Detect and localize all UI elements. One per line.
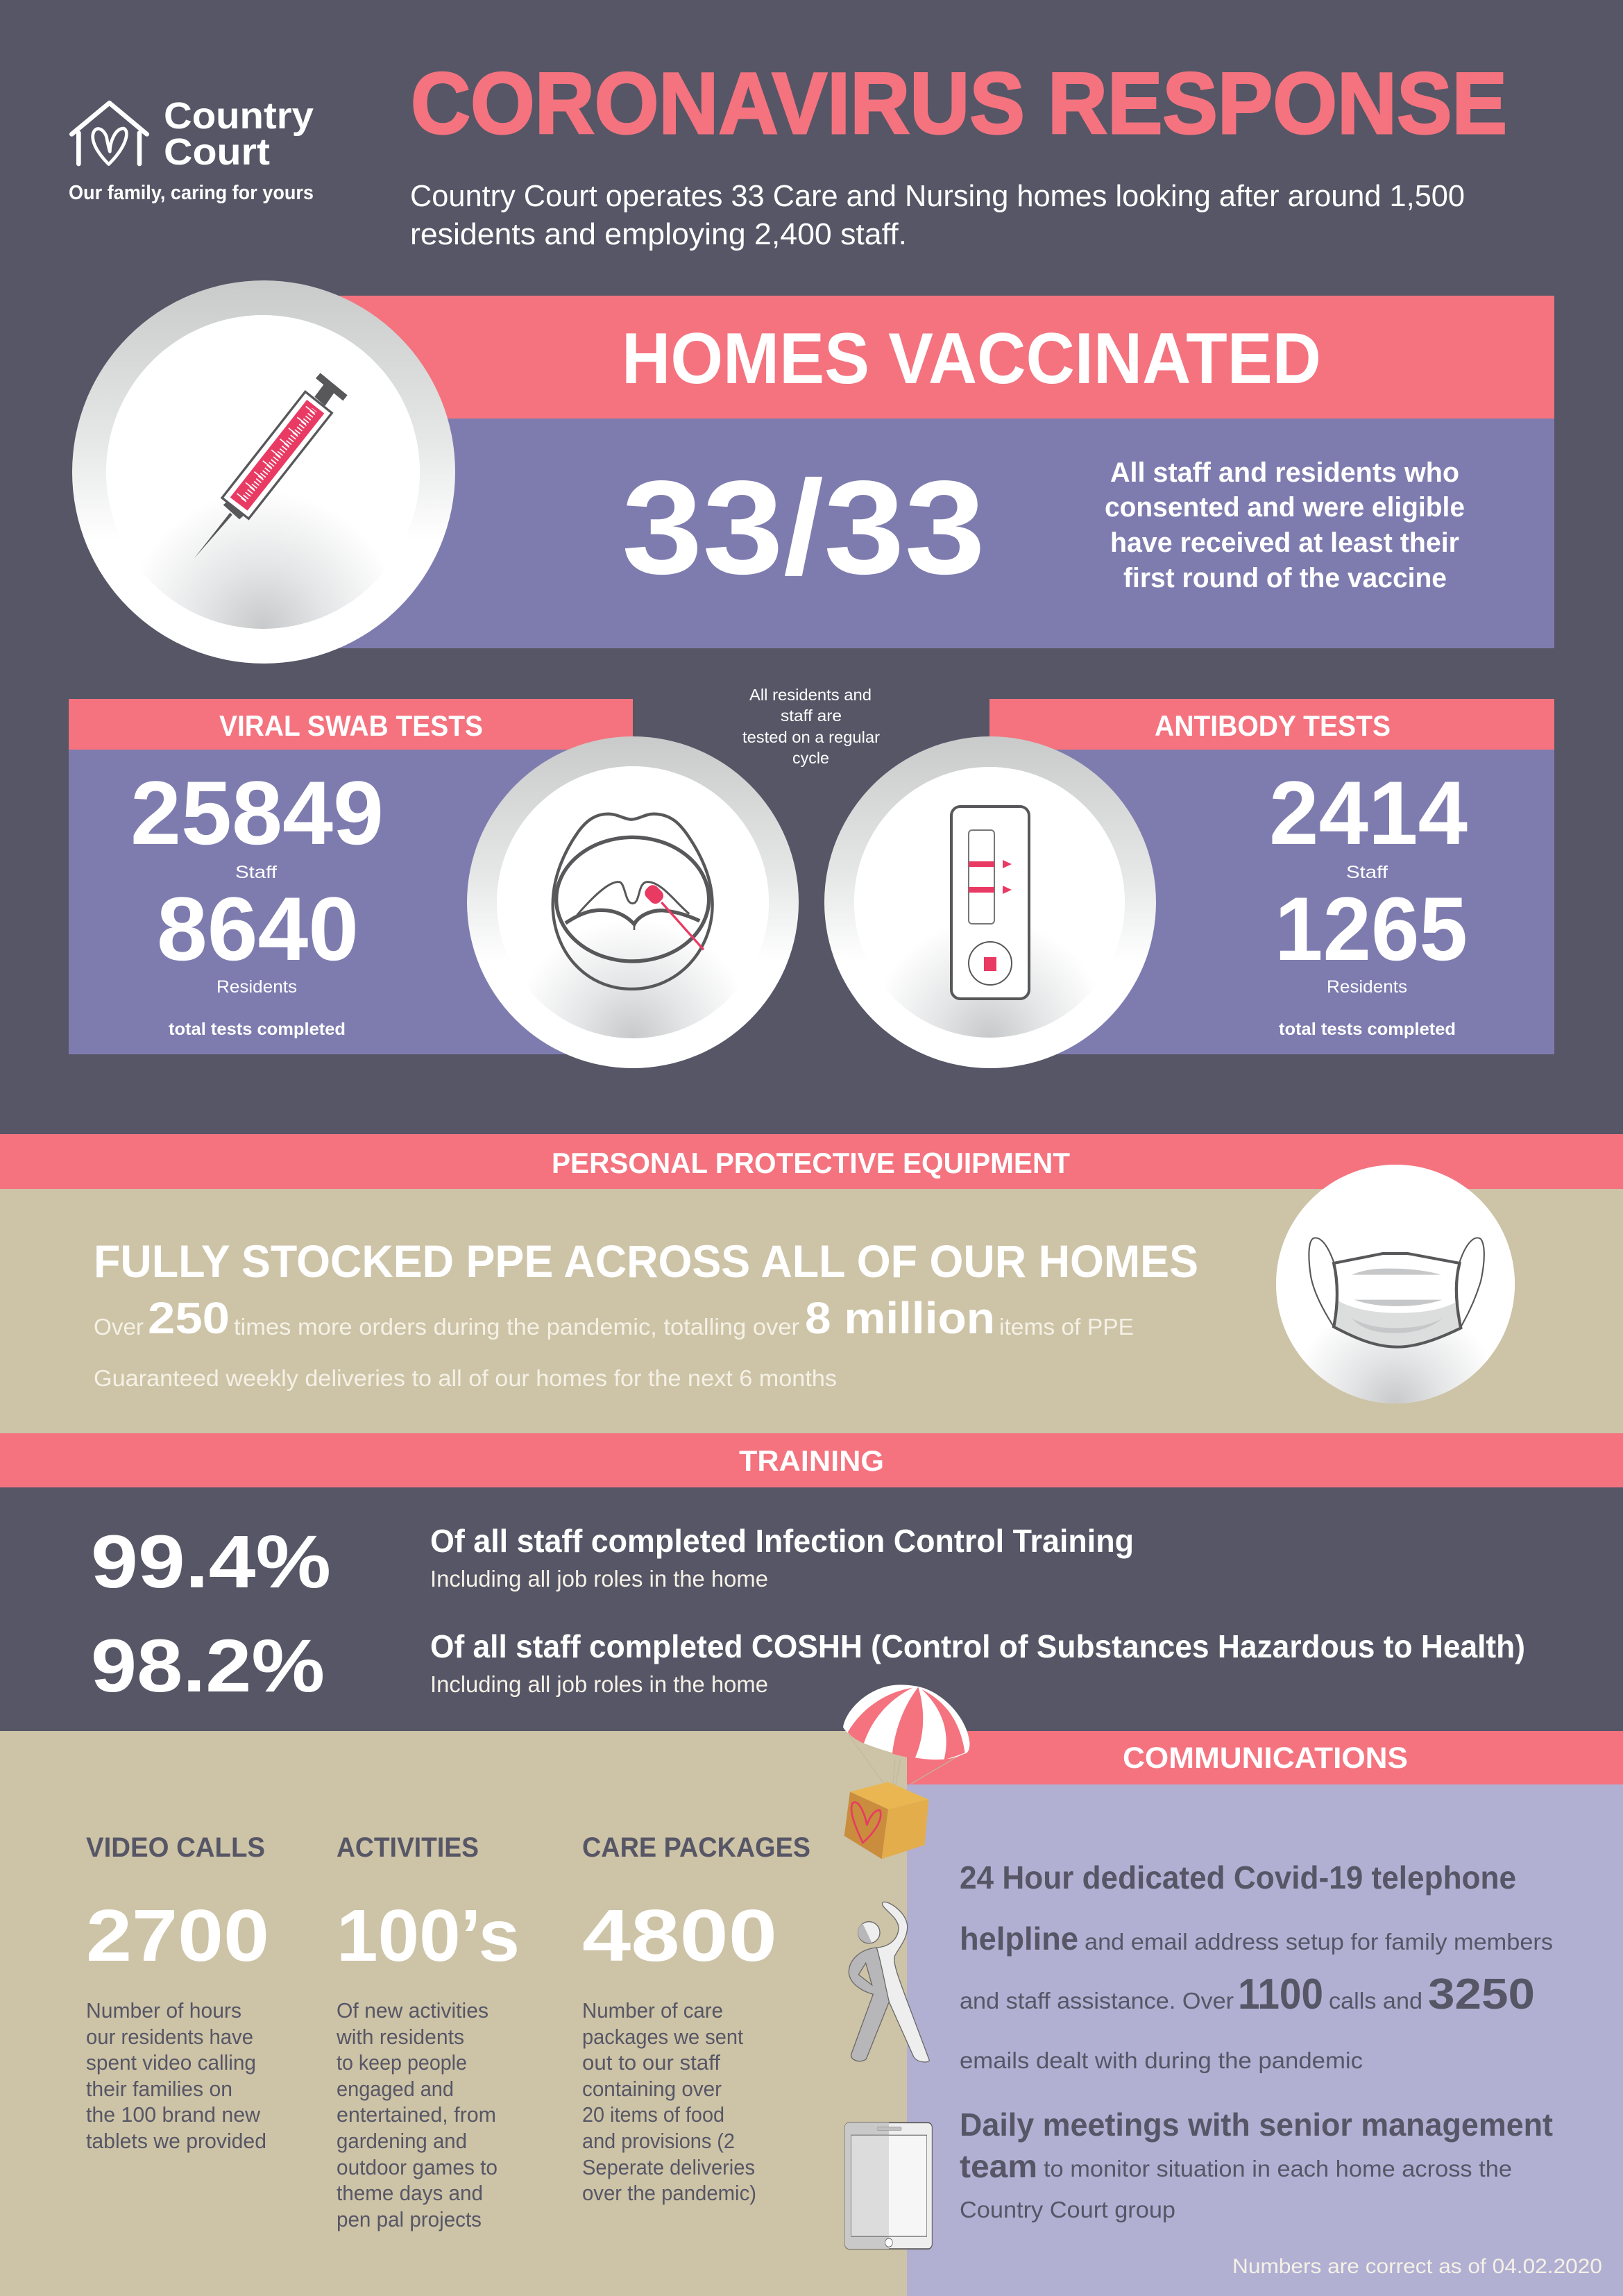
column: care packages [582, 1832, 810, 2205]
stat: infection control [91, 1519, 1134, 1603]
heading: HOMES VACCINATED [622, 319, 1321, 399]
column: video calls: 2700 [86, 1895, 269, 1977]
meetings text: Daily meetings with senior management [960, 2107, 1553, 2143]
column: care packages: containing over [582, 2077, 722, 2101]
panel body [907, 1784, 1623, 2296]
statement: FULLY STOCKED PPE ACROSS ALL OF OUR HOMES [94, 1235, 1198, 1287]
panel body [333, 419, 1554, 648]
note: regular testing [742, 686, 880, 767]
logo wordmark [164, 95, 314, 173]
stat: infection control: Including all job roles in the home [430, 1566, 768, 1592]
column: video calls: Number of hours [86, 1998, 241, 2023]
residents label: Residents [1327, 977, 1407, 997]
note: regular testing: tested on a regular [742, 728, 880, 746]
heading: TRAINING [739, 1444, 884, 1477]
staff number: 25849 [130, 762, 384, 863]
banner [907, 1731, 1623, 1784]
description: consented and were eligible [1105, 492, 1465, 523]
column: video calls: our residents have [86, 2025, 253, 2049]
column: care packages: packages we sent [582, 2025, 743, 2049]
column: activities: engaged and [337, 2077, 454, 2101]
helpline text: and email address setup for family members [1085, 1929, 1553, 1955]
staff label: Staff [235, 863, 277, 882]
banner [333, 296, 1554, 419]
heading: ANTIBODY TESTS [1155, 709, 1391, 742]
description [1105, 457, 1465, 593]
residents number: 8640 [157, 878, 359, 979]
heading: VIRAL SWAB TESTS [219, 709, 483, 742]
panel: communications [907, 1731, 1623, 2296]
column: activities: 100’s [337, 1895, 520, 1977]
description: first round of the vaccine [1123, 563, 1447, 593]
column: video calls: VIDEO CALLS [86, 1832, 265, 1863]
footnote: Numbers are correct as of 04.02.2020 [1232, 2255, 1602, 2278]
heading: COMMUNICATIONS [1123, 1741, 1408, 1775]
banner [0, 1134, 1623, 1189]
helpline text: calls and [1329, 1988, 1422, 2014]
caption: total tests completed [169, 1020, 346, 1039]
icon: syringe in circle [72, 280, 455, 664]
section: personal protective equipment [0, 1134, 1623, 1433]
note: regular testing: staff are [781, 707, 842, 725]
note: regular testing: cycle [792, 749, 829, 767]
banner [989, 699, 1554, 750]
column: activities: to keep people [337, 2050, 467, 2075]
logo wordmark: Court [164, 131, 270, 173]
column: care packages: Seperate deliveries [582, 2155, 755, 2179]
column: activities: pen pal projects [337, 2207, 482, 2231]
meetings text: to monitor situation in each home across the [1044, 2156, 1512, 2181]
icon: test cassette in circle [824, 736, 1156, 1068]
stat line: 250 [148, 1293, 230, 1343]
stat: COSHH [91, 1623, 1525, 1707]
panel body [999, 750, 1554, 1054]
panel body [0, 1189, 1623, 1433]
column: video calls [86, 1832, 269, 2153]
icon: house with heart [71, 103, 147, 164]
helpline text: 1100 [1238, 1970, 1323, 2018]
residents label: Residents [216, 977, 297, 997]
icon: tablet [845, 2122, 932, 2249]
panel: homes vaccinated [72, 280, 1554, 664]
column: video calls: the 100 brand new [86, 2102, 261, 2127]
heading: PERSONAL PROTECTIVE EQUIPMENT [552, 1147, 1070, 1179]
helpline text: helpline [960, 1921, 1078, 1957]
helpline text: emails dealt with during the pandemic [960, 2048, 1363, 2073]
column: activities: Of new activities [337, 1998, 488, 2023]
caption: total tests completed [1279, 1020, 1456, 1039]
stat line: 8 million [805, 1293, 995, 1343]
panel: community stats [0, 1731, 907, 2296]
intro text: residents and employing 2,400 staff. [410, 217, 907, 251]
column: care packages: CARE PACKAGES [582, 1832, 810, 1863]
big number: 33/33 [622, 453, 985, 602]
meetings text [960, 2107, 1553, 2222]
panel: viral swab tests [69, 699, 799, 1068]
meetings text: team [960, 2148, 1037, 2184]
column: care packages: 4800 [582, 1895, 777, 1977]
panel: antibody tests [824, 699, 1554, 1068]
residents number: 1265 [1275, 878, 1468, 979]
stat: infection control: Of all staff completed Infection Control Training [430, 1523, 1134, 1559]
column: activities: outdoor games to [337, 2155, 498, 2179]
column: activities: entertained, from [337, 2102, 496, 2127]
icon: person waving [849, 1902, 929, 2062]
stat line: items of PPE [999, 1314, 1134, 1340]
column: activities: theme days and [337, 2181, 483, 2205]
intro text: Country Court operates 33 Care and Nursing homes looking after around 1,500 [410, 179, 1465, 213]
note: regular testing: All residents and [749, 686, 872, 704]
column: care packages: Number of care [582, 1998, 723, 2023]
column: care packages: over the pandemic) [582, 2181, 756, 2205]
stat line: times more orders during the pandemic, totalling over [234, 1314, 799, 1340]
column: activities [336, 1832, 520, 2231]
staff label: Staff [1346, 863, 1388, 882]
stat: COSHH: Including all job roles in the home [430, 1671, 768, 1697]
section: training [0, 1433, 1623, 1707]
intro text [410, 179, 1465, 251]
banner [0, 1433, 1623, 1487]
column: activities: ACTIVITIES [337, 1832, 479, 1863]
icon: mouth swab in circle [467, 736, 799, 1068]
column: activities: gardening and [337, 2129, 467, 2153]
title: CORONAVIRUS RESPONSE [411, 56, 1507, 152]
column: video calls: tablets we provided [86, 2129, 266, 2153]
stat line [94, 1293, 1134, 1343]
helpline text [960, 1859, 1553, 2073]
helpline text: 24 Hour dedicated Covid-19 telephone [960, 1859, 1516, 1896]
column: care packages: 20 items of food [582, 2102, 724, 2127]
column: video calls: their families on [86, 2077, 232, 2101]
icon: face mask in circle [1276, 1165, 1515, 1403]
staff number: 2414 [1269, 762, 1468, 863]
stat: COSHH: 98.2% [91, 1623, 325, 1707]
column: care packages: and provisions (2 [582, 2129, 735, 2153]
helpline text: and staff assistance. Over [960, 1988, 1234, 2014]
logo tagline: Our family, caring for yours [69, 182, 314, 204]
description: All staff and residents who [1110, 457, 1459, 488]
icon: parachute with care package [843, 1685, 969, 1859]
logo [69, 95, 314, 204]
logo wordmark: Country [164, 95, 314, 137]
helpline text: 3250 [1428, 1970, 1535, 2018]
column: activities: with residents [336, 2025, 464, 2049]
column: video calls: spent video calling [86, 2050, 256, 2075]
meetings text: Country Court group [960, 2197, 1175, 2222]
description: have received at least their [1110, 527, 1459, 558]
banner [69, 699, 633, 750]
stat: COSHH: Of all staff completed COSHH (Control of Substances Hazardous to Health) [430, 1628, 1525, 1664]
deliveries line: Guaranteed weekly deliveries to all of our homes for the next 6 months [94, 1365, 837, 1391]
stat: infection control: 99.4% [91, 1519, 331, 1603]
column: care packages: out to our staff [582, 2050, 720, 2075]
stat line: Over [94, 1314, 144, 1340]
panel body [69, 750, 624, 1054]
